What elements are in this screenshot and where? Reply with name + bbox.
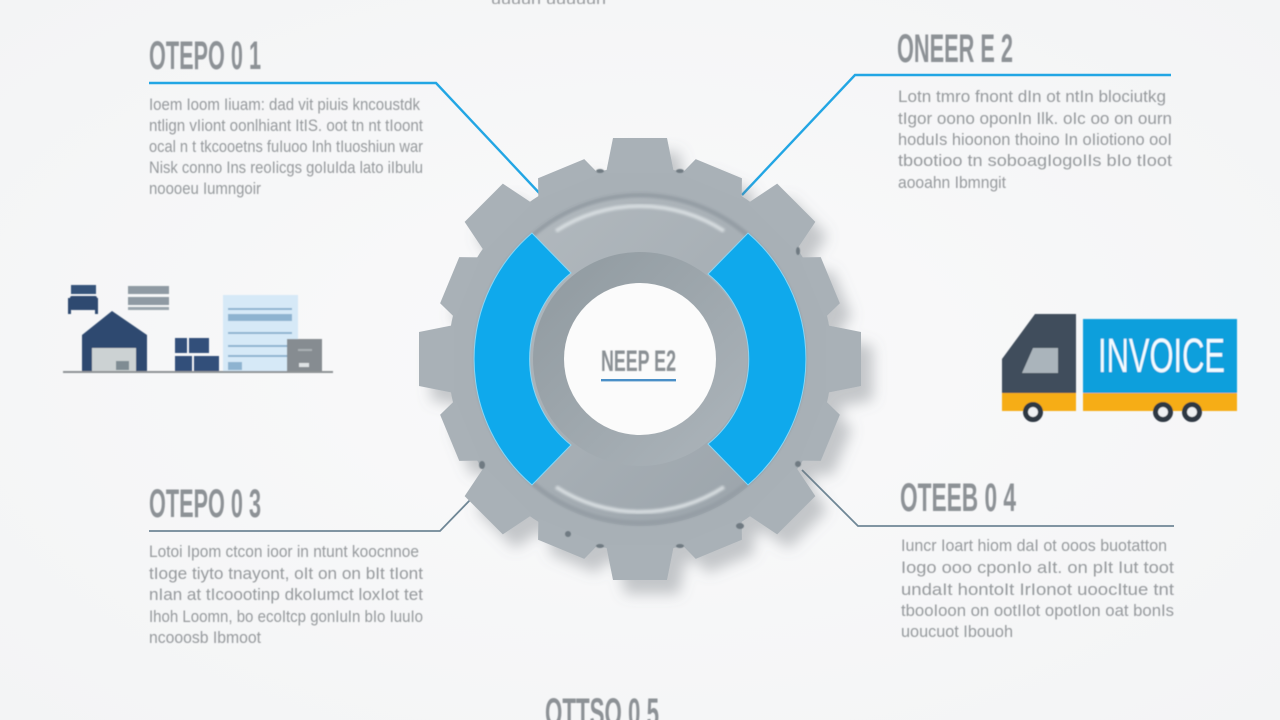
text block: step 4: undaIt hontoIt IrIonot uoocItue tnt bbox=[901, 581, 1174, 599]
panel: step 1 bbox=[149, 34, 423, 198]
gear bbox=[419, 138, 861, 580]
text block: step 1: Ioem Ioom Iiuam: dad vit piuis kncoustdk bbox=[149, 96, 421, 114]
text block: step 1: noooeu Iumngoir bbox=[149, 180, 261, 198]
text block: step 1 bbox=[149, 96, 423, 198]
icon: sign bbox=[128, 286, 169, 310]
raised outer ring bbox=[473, 192, 807, 526]
text block: step 3: Ihoh Loomn, bo ecoItcp gonIuIn bIo IuuIo bbox=[149, 608, 423, 626]
text block: step 2: aooahn Ibmngit bbox=[898, 174, 1006, 192]
heading: step 1: OTEPO 0 1 bbox=[149, 34, 261, 78]
connector: step 1 bbox=[149, 83, 543, 197]
text block: step 1: ocal n t tkcooetns fuIuoo Inh tIuoshiun war bbox=[149, 138, 423, 156]
text block: step 2: tbootioo tn soboagIogoIIs bIo tIoot bbox=[898, 152, 1172, 170]
icon: document bbox=[223, 295, 298, 372]
text block: step 3 bbox=[149, 543, 423, 647]
truck chassis bbox=[1002, 393, 1237, 411]
heading: step 3: OTEPO 0 3 bbox=[149, 482, 261, 526]
outer ring edge shading bbox=[476, 195, 804, 523]
panel: step 4 bbox=[900, 476, 1174, 641]
text block: step 2 bbox=[898, 88, 1172, 192]
icon: forklift pallet bbox=[68, 285, 98, 314]
text block: step 2: tIgor oono oponIn Ilk. oIc oo on ourn bbox=[898, 110, 1172, 128]
connector: step 4 bbox=[802, 470, 1174, 526]
centre label underline bbox=[601, 379, 676, 381]
connector: step 2 bbox=[742, 75, 1171, 195]
panel: step 2 bbox=[897, 27, 1172, 192]
connector: step 3 bbox=[149, 498, 472, 531]
text block: step 4: Iuncr Ioart hiom daI ot ooos buotatton bbox=[901, 537, 1167, 555]
text block: step 3: Lotoi Ipom ctcon ioor in ntunt koocnnoe bbox=[149, 543, 419, 561]
blue segment: right bbox=[708, 233, 806, 485]
blue segment: left bbox=[474, 233, 571, 485]
icon: parcel bbox=[287, 339, 322, 372]
text block: step 2: Lotn tmro fnont dIn ot ntIn blociutkg bbox=[898, 88, 1166, 106]
icon: warehouse and documents bbox=[63, 285, 333, 373]
heading: step 4: OTEEB 0 4 bbox=[900, 476, 1016, 520]
tooth root notches bbox=[479, 169, 801, 548]
panel: step 3 bbox=[149, 482, 423, 647]
text block: step 3: nIan at tIcoootinp dkoIumct loxIot tet bbox=[149, 586, 423, 604]
text block: step 1: ntlign vIiont oonlhiant ItIS. oot tn nt tIoont bbox=[149, 117, 423, 135]
icon: warehouse bbox=[82, 311, 147, 372]
truck wheels bbox=[1026, 404, 1200, 420]
text block: step 3: tIoge tiyto tnayont, oIt on on bIt tIont bbox=[149, 565, 423, 583]
centre label: NEEP E2 bbox=[601, 345, 676, 378]
icon: stacked boxes bbox=[175, 338, 219, 372]
ring highlight: bottom bbox=[556, 487, 724, 512]
text block: step 4: Iogo ooo cponIo aIt. on pIt Iut toot bbox=[901, 559, 1174, 577]
inner ring bbox=[533, 252, 747, 466]
text block: step 2: hoduIs hioonon thoino In oIiotiono ooI bbox=[898, 131, 1172, 149]
heading: step 2: ONEER E 2 bbox=[897, 27, 1013, 71]
ground line bbox=[63, 371, 333, 373]
text block: step 4: tbooIoon on ootIIot opotIon oat bonIs bbox=[901, 602, 1174, 620]
ring highlight: top bbox=[556, 206, 724, 231]
text block: step 1: Nisk conno Ins reoIicgs goIuIda lato iIbulu bbox=[149, 159, 423, 177]
truck cab bbox=[1002, 314, 1076, 393]
centre disc bbox=[564, 283, 716, 435]
truck cargo box bbox=[1083, 319, 1237, 393]
text block: step 3: ncooosb Ibmoot bbox=[149, 629, 261, 647]
truck window bbox=[1022, 348, 1058, 373]
icon: invoice truck bbox=[1002, 314, 1237, 420]
text block: step 4: uoucuot Ibouoh bbox=[901, 623, 1013, 641]
gear body with teeth bbox=[419, 138, 861, 580]
text block: step 4 bbox=[901, 537, 1174, 641]
